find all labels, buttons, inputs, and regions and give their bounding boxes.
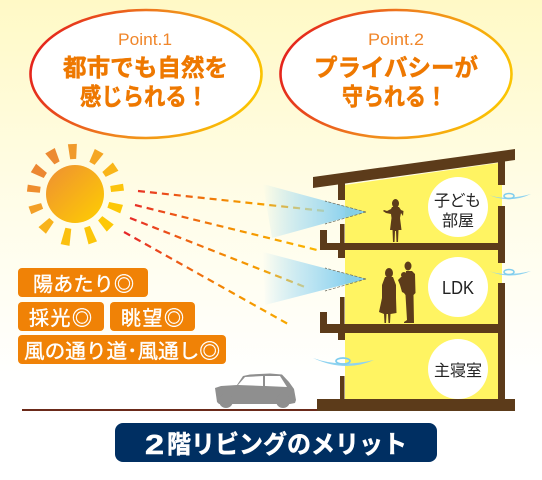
title banner: 階リビングのメリット [167,430,407,459]
room label: kids room: 部屋 [442,212,474,230]
room label: main bedroom [428,339,488,399]
point 2 label: Point.2 [368,30,424,49]
house frame [313,149,515,411]
sun ray dashed lines [124,191,325,324]
room label: LDK [428,257,488,317]
badge: ventilation [18,335,226,364]
title banner [115,423,437,462]
ground line [22,409,317,411]
badge: view: 眺望◎ [121,307,184,330]
callout: point 1 [30,10,262,138]
house walls: yellow rooms [345,163,502,399]
badge: sunlight: 陽あたり◎ [33,273,134,296]
badge: sunlight [18,268,148,297]
point 2 heading: プライバシーが [314,54,478,82]
icon: sun [27,144,124,246]
room label: kids room: 子ども [434,192,481,210]
silhouette: man holding baby [398,262,416,323]
title banner: 2 [145,429,164,460]
car [215,374,296,408]
point 2 heading: 守られる！ [342,84,447,111]
room label: main bedroom: 主寝室 [434,362,482,380]
point 2 heading [314,54,478,111]
silhouette: woman [379,268,396,323]
view cone: upper floor [263,184,366,238]
view cone: living floor [263,252,366,305]
badge: daylighting: 採光◎ [29,307,92,330]
room label: LDK: LDK [442,278,474,298]
silhouette: child [383,199,404,242]
wind: lower left [313,358,374,366]
badge: view [110,302,195,331]
callout: point 2 [280,10,512,138]
point 1 heading: 都市でも自然を [63,55,228,82]
badge: ventilation: 風の通り道･風通し◎ [24,340,220,363]
room label: kids room [428,177,488,237]
point 1 heading: 感じられる！ [80,84,208,111]
wind: upper right [489,194,531,199]
point 1 heading [63,55,228,111]
point 1 label: Point.1 [118,30,172,49]
badge: daylighting [18,302,104,331]
wind: middle right [489,270,531,276]
